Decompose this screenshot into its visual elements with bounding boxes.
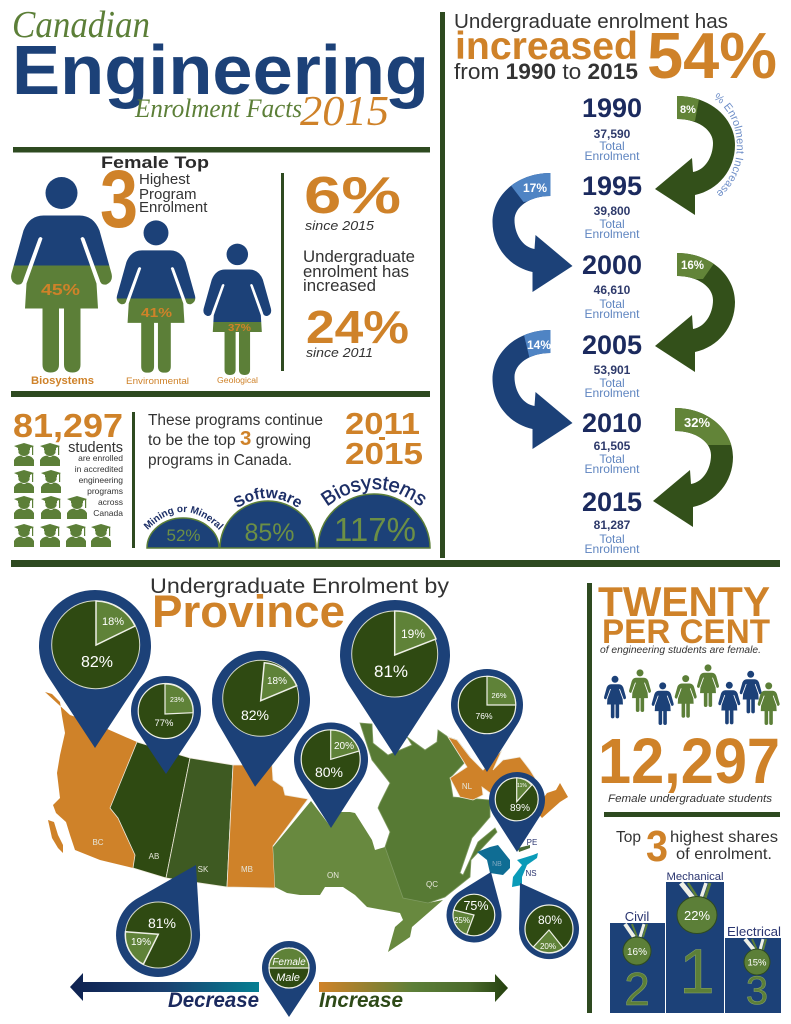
heading: female top 3: Program xyxy=(139,186,197,203)
arrow: 16%: 16% xyxy=(681,260,704,272)
heading: enrolment by province xyxy=(150,574,449,637)
pin: QC 19/81: 19% xyxy=(401,627,425,641)
dome: Mining or Mineral 52% xyxy=(144,506,224,549)
figure: Environmental 41%: Environmental xyxy=(126,376,189,387)
arrow: 32%: 32% xyxy=(684,415,710,430)
panel: undergraduate growth stats: since 2015 xyxy=(305,218,375,233)
year: 2010: 61,505 xyxy=(594,439,631,453)
figure: Biosystems 45%: Biosystems xyxy=(31,375,94,387)
heading: twenty per cent: of engineering students are female. xyxy=(600,645,761,656)
text: students enrolled: engineering xyxy=(79,475,123,485)
heading: top 3 shares: of enrolment. xyxy=(676,846,772,863)
podium: Electrical 15%: Electrical xyxy=(727,925,781,939)
heading: female top 3: Enrolment xyxy=(139,199,208,216)
pin: PE 11/89 xyxy=(489,772,545,852)
heading: twenty per cent xyxy=(598,578,770,656)
province: NL: NL xyxy=(462,782,473,791)
text: students enrolled: are enrolled xyxy=(78,453,123,463)
icons: graduate caps xyxy=(14,443,111,547)
province: MB: MB xyxy=(241,865,253,874)
text: programs continue: to be the top 3 growing xyxy=(148,428,311,450)
pin: NS 20/80 xyxy=(495,867,590,970)
panel: top 3 shares of enrolment xyxy=(610,822,781,1015)
panel: undergraduate growth stats: 24% xyxy=(306,301,409,353)
icons: row of eight women xyxy=(604,664,780,725)
heading: female top 3: 3 xyxy=(100,154,138,245)
province: BC: BC xyxy=(92,838,104,847)
heading: female top 3: Highest xyxy=(139,171,191,188)
pin: NL 26/76: 76% xyxy=(475,711,493,721)
province: MB xyxy=(227,765,308,888)
pin: SK 19/81: 81% xyxy=(148,915,176,931)
heading: increased 54%: Undergraduate enrolment has xyxy=(454,10,728,33)
province: NL xyxy=(448,737,568,818)
pin: MB 18/82 xyxy=(206,648,313,790)
year: 2000: 2000 xyxy=(582,250,642,280)
figure: Biosystems 45% xyxy=(11,177,112,387)
year: 1995: 39,800 xyxy=(594,204,631,218)
panel: top 3 growing programs xyxy=(144,406,431,549)
text: programs continue xyxy=(148,412,323,469)
podium: Civil 16%: 16% xyxy=(627,947,647,958)
heading: top 3 shares xyxy=(616,822,778,871)
province: PE: PE xyxy=(527,838,537,847)
legend: decrease arrow: Decrease xyxy=(168,989,259,1012)
province: AB: AB xyxy=(149,852,159,861)
figure: Environmental 41%: 41% xyxy=(141,305,173,320)
pin: NB 25/75 xyxy=(438,862,517,951)
year: 2010: Total xyxy=(599,452,625,466)
pin: QC 19/81: 81% xyxy=(374,662,408,681)
heading: enrolment by province: Province xyxy=(152,586,345,637)
province: ON xyxy=(273,801,443,952)
heading: female top 3 xyxy=(100,153,209,245)
dome: Biosystems 117%: 117% xyxy=(334,511,416,548)
arrow: 16% xyxy=(655,253,735,372)
text: programs continue: programs in Canada. xyxy=(148,452,292,469)
text: students enrolled: students xyxy=(68,440,123,456)
year: 1990: Total xyxy=(599,139,625,153)
arrow: 14%: 14% xyxy=(527,338,551,352)
year: 1995: Enrolment xyxy=(584,227,640,241)
pin: QC 19/81 xyxy=(340,600,450,756)
panel: 81,297 students xyxy=(13,407,123,547)
province: AB xyxy=(110,742,190,878)
year: 1990 xyxy=(582,93,642,163)
pin: ON 20/80: 80% xyxy=(315,764,343,780)
province: SK xyxy=(166,758,233,887)
map: Canada provinces xyxy=(45,692,568,952)
heading: twenty per cent: PER CENT xyxy=(602,613,770,651)
heading: increased 54% xyxy=(454,10,777,92)
panel: undergraduate growth stats: increased xyxy=(303,277,376,295)
heading: female top 3: Female Top xyxy=(101,153,209,172)
heading: 2011-2015: 2011 xyxy=(345,406,420,441)
year: 2015: Enrolment xyxy=(584,542,640,556)
year: 1990: 1990 xyxy=(582,93,642,123)
pin: NS 20/80: 20% xyxy=(540,942,556,951)
text: students enrolled: Canada xyxy=(93,508,123,518)
year: 1995: Total xyxy=(599,217,625,231)
rule: right panel xyxy=(604,812,780,817)
heading: top 3 shares: highest shares xyxy=(670,829,778,846)
heading: 2011-2015 xyxy=(345,406,423,471)
panel: twenty per cent female xyxy=(598,578,780,805)
province: ON: ON xyxy=(327,871,339,880)
year: 2005 xyxy=(582,330,642,400)
panel: undergraduate growth stats xyxy=(303,167,415,360)
year: 2015: 2015 xyxy=(582,487,642,517)
arrow: 8%: 8% xyxy=(680,104,696,116)
pin: NS 20/80: 80% xyxy=(538,913,562,927)
legend pin: female / male xyxy=(262,941,316,1017)
dome: Software 85% xyxy=(219,488,317,549)
legend pin: female / male: Female xyxy=(272,957,306,968)
arrow: 14% xyxy=(492,330,572,449)
podium: Electrical 15% xyxy=(725,925,781,1013)
stat: 12,297: 12,297 xyxy=(598,725,780,797)
pin: SK 19/81: 19% xyxy=(131,937,151,948)
figure: Geological 37%: Geological xyxy=(217,376,258,385)
figure: Geological 37% xyxy=(203,244,271,385)
podium: Mechanical 22% xyxy=(666,871,724,1013)
text: students enrolled: across xyxy=(98,497,123,507)
province: NS: NS xyxy=(525,869,537,878)
year: 2005: Total xyxy=(599,376,625,390)
legend: increase arrow: Increase xyxy=(319,989,403,1012)
dome: Mining or Mineral 52%: Mining or Mineral xyxy=(144,506,224,530)
year: 2015: 81,287 xyxy=(594,518,631,532)
province: QC xyxy=(360,723,497,903)
pin: BC 18/82: 18% xyxy=(102,616,124,628)
province: NB xyxy=(477,845,510,875)
year: 2000 xyxy=(582,250,642,321)
pin: ON 20/80: 20% xyxy=(334,741,354,752)
year: 2000: Total xyxy=(599,297,625,311)
text: students enrolled: in accredited xyxy=(75,464,123,474)
pin: MB 18/82: 82% xyxy=(241,707,269,723)
pin: AB 23/77: 77% xyxy=(154,718,174,729)
dome: Software 85%: 85% xyxy=(244,519,295,547)
province: QC: QC xyxy=(426,880,438,889)
heading: top 3 shares: Top xyxy=(616,829,641,846)
text: students enrolled: programs xyxy=(87,486,123,496)
heading: increased 54%: 54% xyxy=(647,19,777,92)
stat: 81,297: 81,297 xyxy=(13,407,123,444)
podium: Civil 16%: 2 xyxy=(624,963,650,1015)
figure: Geological 37%: 37% xyxy=(228,323,251,334)
legend pin: female / male: Male xyxy=(276,972,300,984)
pin: BC 18/82: 82% xyxy=(81,654,113,671)
podium: Electrical 15%: 15% xyxy=(747,958,767,968)
panel: enrolment timeline xyxy=(492,93,744,556)
podium: Civil 16%: Civil xyxy=(625,909,649,924)
podium: Electrical 15%: 3 xyxy=(746,969,768,1013)
panel: undergraduate growth stats: since 2011 xyxy=(306,345,373,360)
heading: increased 54%: increased xyxy=(455,25,638,68)
dome: Mining or Mineral 52%: 52% xyxy=(166,526,201,545)
province: NS xyxy=(512,853,538,887)
pin: NL 26/76: 26% xyxy=(491,691,507,700)
dome: Biosystems 117% xyxy=(317,476,431,549)
year: 1990: Enrolment xyxy=(584,149,640,163)
figure: Environmental 41% xyxy=(117,220,195,387)
heading: increased 54%: from 1990 to 2015 xyxy=(454,59,638,84)
arrow: 8% xyxy=(655,96,735,215)
title: Engineering xyxy=(12,31,429,109)
year: 2010: Enrolment xyxy=(584,462,640,476)
panel: undergraduate growth stats: enrolment has xyxy=(303,263,409,281)
year: 2010: 2010 xyxy=(582,408,642,438)
stat: 12,297: Female undergraduate students xyxy=(608,793,773,805)
panel: undergraduate growth stats: 6% xyxy=(304,167,401,225)
pin: ON 20/80 xyxy=(294,722,368,828)
pin: PE 11/89: 11% xyxy=(517,783,527,789)
province: BC xyxy=(45,692,137,868)
legend: increase arrow xyxy=(319,974,508,1012)
arrow: 17%: 17% xyxy=(523,181,547,195)
arrow: 32% xyxy=(653,408,733,527)
podium: Mechanical 22%: 1 xyxy=(679,937,715,1007)
heading: twenty per cent: TWENTY xyxy=(598,578,770,625)
heading: 2011-2015: 2015 xyxy=(345,436,423,471)
year: 2010 xyxy=(582,408,642,476)
year: 2005: 53,901 xyxy=(594,363,631,377)
year: 2015: Total xyxy=(599,532,625,546)
pin: SK 19/81 xyxy=(101,845,233,992)
heading: top 3 shares: 3 xyxy=(646,822,668,871)
year: 2005: Enrolment xyxy=(584,386,640,400)
pin: NL 26/76 xyxy=(451,669,523,772)
pin: BC 18/82 xyxy=(39,590,151,748)
pin: AB 23/77: 23% xyxy=(170,697,184,704)
arrow: 17% xyxy=(492,173,572,292)
text: programs continue: These programs continue xyxy=(148,412,323,429)
pin: PE 11/89: 89% xyxy=(510,803,530,814)
province: PE xyxy=(518,838,537,852)
year: 1995 xyxy=(582,171,642,241)
year: 2015 xyxy=(582,487,642,556)
podium: Mechanical 22%: Mechanical xyxy=(666,871,724,883)
panel: undergraduate growth stats: Undergraduate xyxy=(303,248,415,266)
label: % enrolment increase: % Enrolment Increase xyxy=(715,93,744,196)
pin: NB 25/75: 25% xyxy=(454,916,470,925)
title: Enrolment Facts xyxy=(134,94,302,123)
year: 1995: 1995 xyxy=(582,171,642,201)
year: 2000: 46,610 xyxy=(594,283,631,297)
year: 1990: 37,590 xyxy=(594,127,631,141)
pin: AB 23/77 xyxy=(131,676,201,774)
province: SK: SK xyxy=(198,865,209,874)
dome: Software 85%: Software xyxy=(234,488,301,507)
podium: Mechanical 22%: 22% xyxy=(684,908,710,923)
panel: female top 3 xyxy=(11,153,271,387)
title: 2015 xyxy=(300,89,389,135)
dome: Biosystems 117%: Biosystems xyxy=(320,476,426,506)
province: NB: NB xyxy=(492,861,502,868)
figure: Biosystems 45%: 45% xyxy=(41,282,80,299)
year: 2000: Enrolment xyxy=(584,307,640,321)
text: students enrolled xyxy=(68,440,123,518)
year: 2005: 2005 xyxy=(582,330,642,360)
title xyxy=(12,4,429,135)
title: Canadian xyxy=(12,4,150,46)
pin: NB 25/75: 75% xyxy=(463,899,489,913)
heading: enrolment by province: Undergraduate Enrolment by xyxy=(150,574,449,598)
legend: decrease arrow xyxy=(70,973,259,1012)
pin: MB 18/82: 18% xyxy=(267,676,287,687)
podium: Civil 16% xyxy=(610,909,665,1015)
